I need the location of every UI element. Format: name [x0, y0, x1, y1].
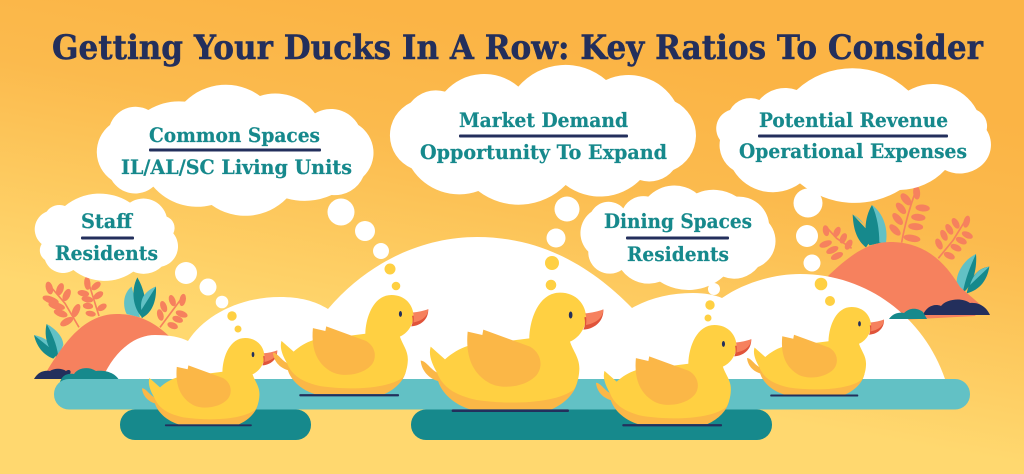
cloud: market demand / opportunity to expand	[390, 65, 696, 205]
cloud shape	[35, 194, 178, 281]
duck 4	[596, 325, 751, 426]
duck 2	[273, 295, 428, 396]
water: dark teal band center	[411, 410, 772, 440]
thought bubbles: second duck	[328, 198, 400, 290]
numerator: Common Spaces	[149, 123, 320, 147]
duck 3	[421, 293, 603, 412]
cloud: common spaces / living units	[97, 85, 374, 216]
numerator: Market Demand	[459, 108, 628, 132]
teal leaves left	[34, 277, 156, 359]
denominator: Opportunity To Expand	[420, 140, 667, 164]
divider line	[626, 236, 729, 240]
numerator: Dining Spaces	[604, 209, 752, 233]
thought bubbles: first duck	[175, 262, 242, 332]
thought bubbles: fourth duck	[704, 283, 720, 322]
divider line	[459, 134, 628, 138]
bush: navy right	[923, 299, 990, 315]
cloud: potential revenue / operational expenses	[716, 68, 991, 203]
coral branches right	[819, 186, 973, 261]
divider line	[758, 134, 948, 138]
divider line	[149, 148, 321, 152]
left coral hill with plants	[34, 277, 188, 379]
cloud: dining spaces / residents	[580, 186, 776, 290]
cloud shape	[716, 68, 991, 203]
cloud: staff / residents	[35, 194, 178, 281]
denominator: Residents	[627, 242, 729, 266]
thought bubbles: third duck	[545, 196, 580, 290]
coral branches left	[42, 277, 188, 330]
water: dark teal band left	[120, 410, 311, 440]
numerator: Potential Revenue	[759, 108, 948, 132]
duck 5	[747, 307, 884, 396]
cloud shape	[580, 186, 776, 290]
cloud shape	[390, 65, 696, 205]
thought bubbles: fifth duck	[794, 188, 835, 306]
right coral hill with plants	[819, 186, 989, 320]
bush: navy left	[34, 369, 71, 379]
water: light teal band	[54, 379, 970, 410]
white hills	[102, 237, 945, 379]
duck 1	[142, 338, 277, 426]
denominator: Residents	[55, 241, 158, 265]
bush: teal left	[60, 368, 120, 382]
denominator: Operational Expenses	[739, 139, 967, 163]
divider line	[81, 236, 134, 240]
numerator: Staff	[81, 209, 134, 233]
teal leaves right	[853, 205, 989, 293]
bush: teal right	[889, 309, 927, 319]
cloud shape	[97, 85, 374, 216]
coral hill left	[42, 314, 169, 379]
coral hill right	[828, 242, 982, 320]
denominator: IL/AL/SC Living Units	[121, 155, 352, 179]
